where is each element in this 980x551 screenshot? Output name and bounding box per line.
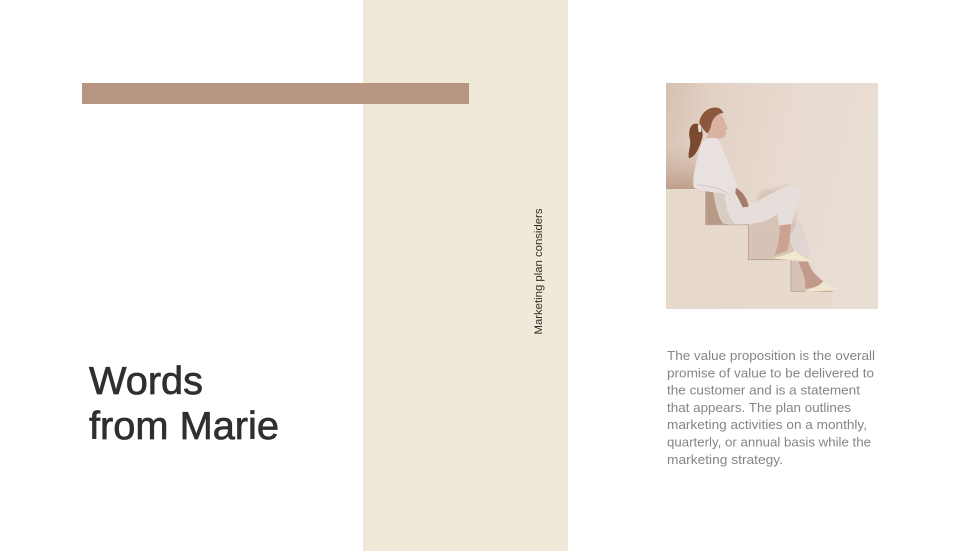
vertical caption: Marketing plan considers xyxy=(533,208,545,334)
hair xyxy=(699,107,723,133)
body paragraph: marketing strategy. xyxy=(667,452,783,467)
title xyxy=(88,360,279,448)
stair recesses xyxy=(706,191,807,291)
front lower leg xyxy=(775,223,791,255)
panel: beige vertical band xyxy=(363,0,568,551)
wall shadow behind figure xyxy=(666,145,698,189)
body paragraph: quarterly, or annual basis while the xyxy=(667,434,871,450)
body paragraph: the customer and is a statement xyxy=(667,383,860,398)
hand xyxy=(735,188,749,207)
wall xyxy=(666,83,878,309)
ponytail xyxy=(689,124,703,158)
stairs xyxy=(666,189,833,309)
tread edges xyxy=(706,189,833,291)
body paragraph: promise of value to be delivered to xyxy=(667,365,874,380)
accent bar xyxy=(82,83,469,104)
rear shoe xyxy=(804,282,841,292)
shirt xyxy=(693,137,738,194)
arm fold xyxy=(697,185,728,194)
rear leg trousers xyxy=(789,219,810,258)
body paragraph xyxy=(667,348,875,467)
title: from Marie xyxy=(89,405,279,448)
hair tie xyxy=(698,125,701,132)
neck and face xyxy=(707,113,728,139)
body paragraph: The value proposition is the overall xyxy=(667,348,875,363)
title: Words xyxy=(89,360,203,403)
photo: woman seated on stairs xyxy=(666,83,878,309)
trousers xyxy=(713,185,799,226)
rear lower leg xyxy=(798,261,823,289)
thigh shading xyxy=(713,192,735,224)
body paragraph: that appears. The plan outlines xyxy=(667,400,852,415)
soft shadow beneath the seat and knee xyxy=(748,185,817,291)
body paragraph: marketing activities on a monthly, xyxy=(667,417,867,432)
front shoe xyxy=(773,250,812,261)
